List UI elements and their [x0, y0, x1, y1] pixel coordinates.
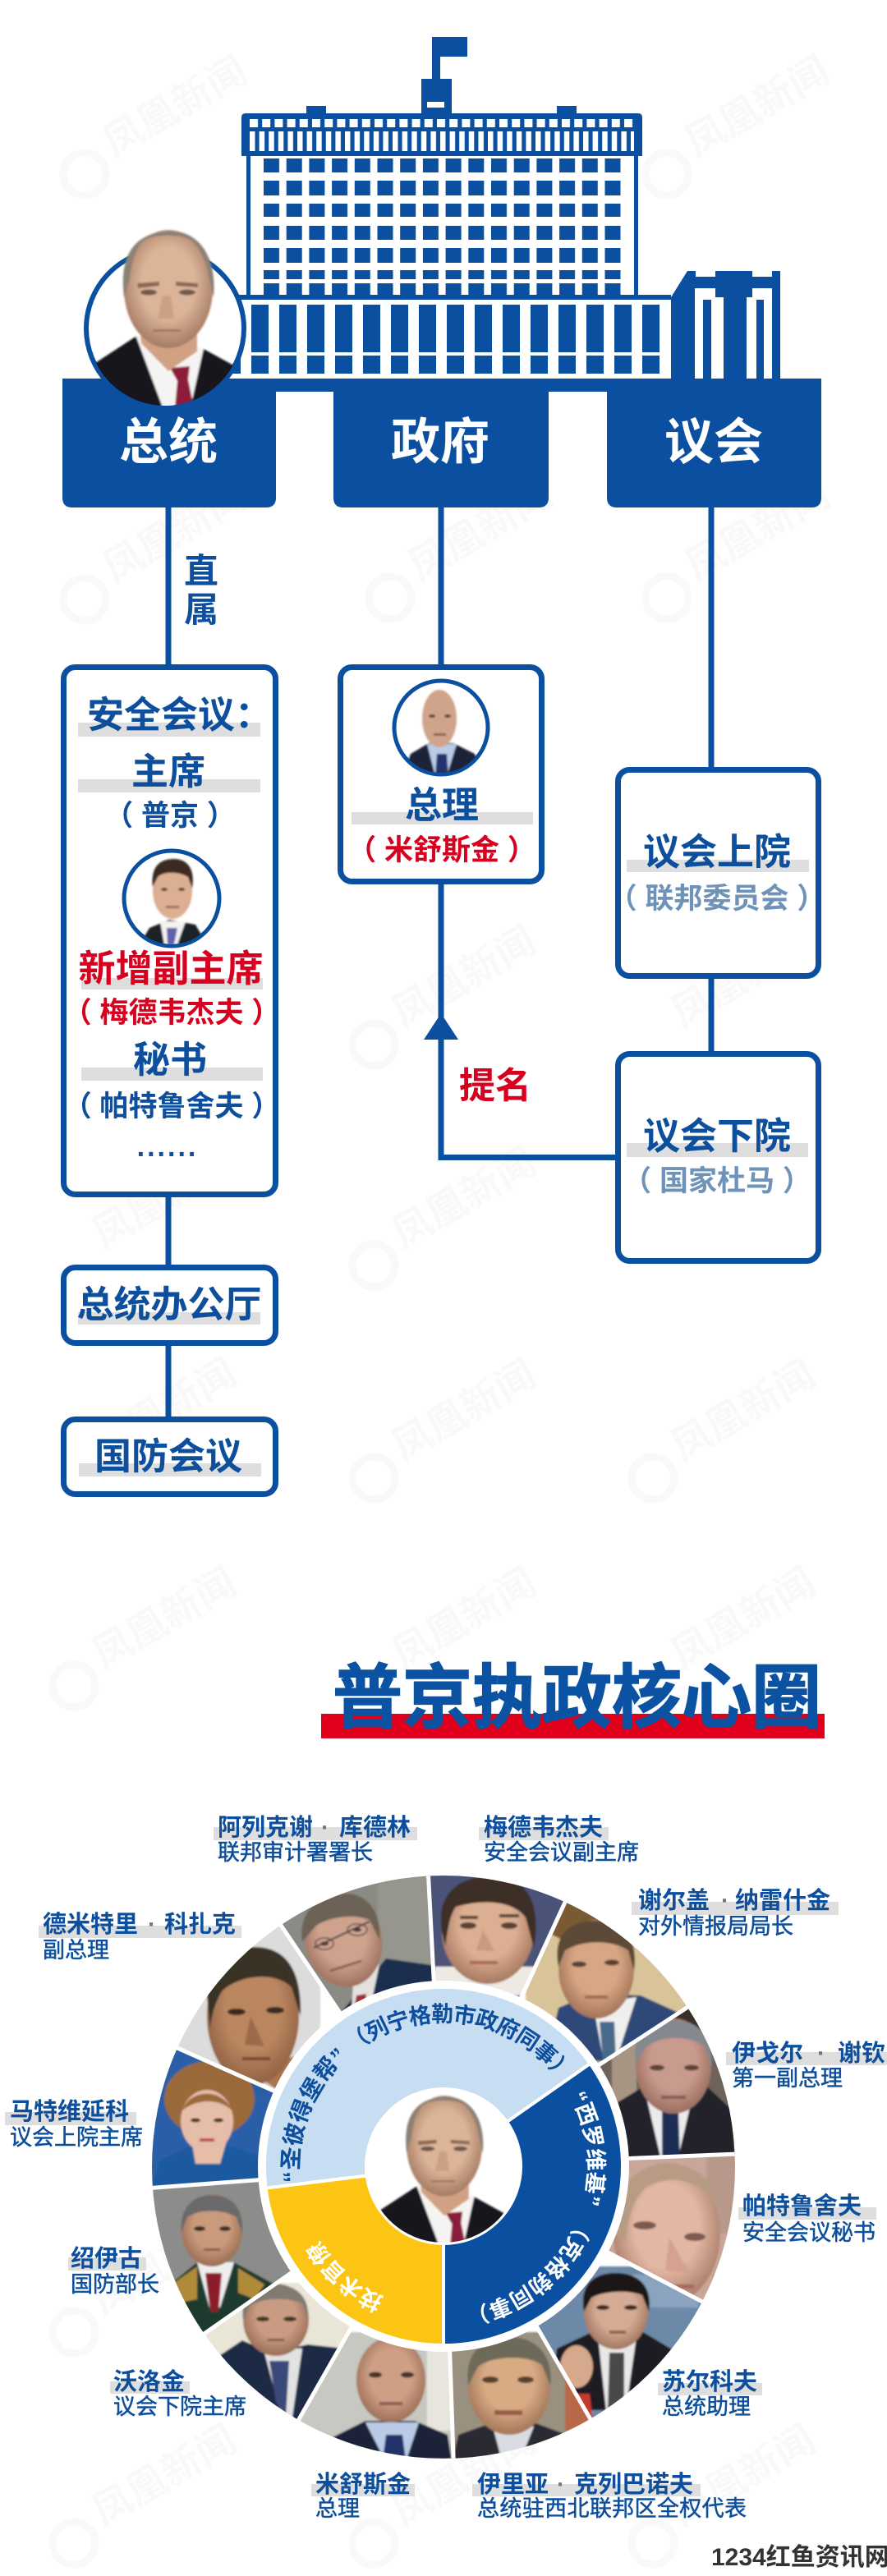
label: Medvedev — [479, 1814, 639, 1865]
label: Sechin: · — [817, 2041, 825, 2067]
label: Kudrin: 联邦审计署署长 — [218, 1840, 373, 1865]
label: direct: 属 — [184, 590, 218, 629]
label: Naryshkin: · — [721, 1888, 729, 1914]
panel: security council: 安全会议： — [87, 694, 272, 736]
site watermark: 1234红鱼资讯网 — [711, 2544, 887, 2571]
panel: prime minister — [340, 667, 542, 882]
watermarks: 凤凰新闻 — [85, 1561, 244, 1678]
panel: security council — [63, 667, 280, 1194]
watermarks: 凤凰新闻 — [385, 1353, 544, 1470]
label: Shoigu: 国防部长 — [71, 2272, 159, 2297]
watermarks: 凤凰新闻 — [402, 473, 560, 590]
portrait: Kozak — [177, 1926, 321, 2089]
label: nominate: 提名 — [459, 1066, 531, 1106]
watermarks: 凤凰新闻 — [664, 2418, 823, 2535]
label: Klebanov: 伊里亚 — [477, 2472, 549, 2498]
portrait wedges — [152, 1876, 735, 2459]
header tabs — [62, 379, 821, 507]
watermarks: 凤凰新闻 — [85, 1141, 244, 1257]
ring: Siloviki group — [445, 2063, 621, 2344]
watermarks: 凤凰新闻 — [96, 49, 255, 166]
label: Klebanov: 总统驻西北联邦区全权代表 — [477, 2496, 747, 2521]
header tabs: 议会 — [664, 415, 763, 470]
watermarks: 凤凰新闻 — [664, 1353, 823, 1470]
panel: security council: 新增副主席 — [78, 948, 264, 990]
header tabs: 政府 — [391, 415, 489, 470]
label: direct: 直 — [184, 552, 218, 590]
panel: security council: （ 普京 ） — [104, 800, 236, 832]
label: Sechin: 伊戈尔 — [732, 2041, 803, 2067]
panel: security council: 主席 — [131, 751, 205, 792]
label: Sechin — [726, 2040, 887, 2091]
portrait: Kudrin — [281, 1876, 432, 2012]
ring: Siloviki group: “西罗维基” — [574, 2092, 607, 2206]
label: Surkov: 总统助理 — [662, 2395, 751, 2419]
header tabs: 总统 — [119, 415, 218, 470]
label: Kozak: 副总理 — [43, 1938, 109, 1963]
watermarks: 凤凰新闻 — [85, 1352, 244, 1468]
ring: Siloviki group: （克格勃同事） — [481, 2230, 590, 2324]
watermarks: 凤凰新闻 — [664, 920, 823, 1036]
portrait: Klebanov — [448, 2332, 590, 2464]
title: 普京执政核心圈 — [333, 1660, 821, 1738]
label: Kozak: · — [148, 1912, 156, 1938]
watermarks: 凤凰新闻 — [385, 1561, 544, 1678]
ring: St Petersburg group — [266, 1989, 588, 2186]
label: Naryshkin: 谢尔盖 — [638, 1888, 710, 1914]
label: Surkov — [658, 2368, 762, 2419]
label: Medvedev: 安全会议副主席 — [484, 1840, 639, 1865]
panel: lower house: 议会下院 — [643, 1115, 791, 1157]
watermarks: 凤凰新闻 — [85, 2207, 244, 2324]
label: Shoigu — [68, 2245, 159, 2297]
portrait: Medvedev — [428, 1876, 565, 1997]
label: Patrushev: 帕特鲁舍夫 — [742, 2192, 862, 2220]
panel: prime minister: 总理 — [405, 784, 479, 826]
portrait: Mishustin — [300, 2332, 456, 2464]
watermarks: 凤凰新闻 — [96, 475, 255, 591]
panel: security council: 秘书 — [133, 1039, 207, 1081]
label: Matviyenko: 马特维延科 — [10, 2098, 129, 2125]
watermarks: 凤凰新闻 — [664, 1561, 823, 1678]
label: Naryshkin: 对外情报局局长 — [638, 1914, 793, 1939]
label: Matviyenko: 议会上院主席 — [10, 2125, 143, 2150]
label: Kudrin: 库德林 — [339, 1814, 411, 1841]
label: Mishustin: 总理 — [315, 2496, 360, 2521]
panel: lower house: （ 国家杜马 ） — [623, 1165, 811, 1197]
portrait: Shoigu — [153, 2182, 291, 2334]
portrait: Medvedev — [124, 851, 219, 946]
portrait: Putin president — [86, 230, 244, 411]
label: Kozak: 德米特里 — [43, 1912, 138, 1938]
label: Mishustin: 米舒斯金 — [315, 2471, 411, 2498]
label: Patrushev: 安全会议秘书 — [742, 2220, 876, 2245]
label: Klebanov — [472, 2471, 747, 2521]
panel: prime minister: （ 米舒斯金 ） — [347, 834, 536, 866]
label: Volodin: 沃洛金 — [113, 2368, 185, 2395]
watermarks: 凤凰新闻 — [664, 1144, 823, 1260]
label: Naryshkin — [632, 1887, 839, 1939]
label: Volodin — [110, 2368, 246, 2419]
portrait: Surkov — [539, 2265, 702, 2419]
panel: lower house — [618, 1054, 818, 1261]
panel: security council: （ 梅德韦杰夫 ） — [63, 997, 280, 1029]
icon: government building — [232, 37, 780, 379]
label: Kozak — [39, 1911, 241, 1963]
portrait: Sechin — [600, 2007, 735, 2156]
ring: St Petersburg group: （列宁格勒市政府同事） — [357, 2003, 565, 2069]
portrait: Naryshkin — [524, 1902, 687, 2063]
portrait: Matviyenko — [152, 2048, 273, 2188]
label: Naryshkin: 纳雷什金 — [735, 1887, 830, 1914]
label: Kudrin: · — [321, 1815, 329, 1841]
label: Sechin: 第一副总理 — [732, 2066, 843, 2091]
label: Surkov: 苏尔科夫 — [662, 2368, 757, 2395]
label: Matviyenko — [5, 2098, 143, 2150]
portrait: Volodin — [205, 2282, 350, 2421]
label: Klebanov: 克列巴诺夫 — [574, 2471, 693, 2498]
watermarks: 凤凰新闻 — [678, 49, 837, 166]
portrait: Putin center — [365, 2087, 522, 2249]
connector lines — [166, 501, 715, 1418]
watermarks: 凤凰新闻 — [385, 1141, 544, 1257]
ring: St Petersburg group: “圣彼得堡帮” — [280, 2048, 340, 2181]
watermarks: 凤凰新闻 — [385, 920, 544, 1036]
panel: upper house: （ 联邦委员会 ） — [609, 883, 825, 915]
label: Medvedev: 梅德韦杰夫 — [484, 1814, 603, 1841]
panel: upper house: 议会上院 — [643, 831, 791, 873]
watermarks: 凤凰新闻 — [385, 2418, 544, 2535]
ring: technocrats: 技术官僚 — [306, 2240, 384, 2314]
ring: technocrats — [267, 2174, 442, 2344]
wheel of inner circle — [152, 1876, 735, 2459]
label: Shoigu: 绍伊古 — [71, 2245, 142, 2272]
panel: presidential office: 总统办公厅 — [76, 1283, 262, 1325]
label: Volodin: 议会下院主席 — [113, 2395, 246, 2419]
watermarks: 凤凰新闻 — [85, 2418, 244, 2535]
watermarks: 凤凰新闻 — [678, 473, 837, 590]
label: Mishustin — [311, 2471, 415, 2521]
panel: presidential office — [64, 1268, 276, 1343]
portrait: Mishustin — [394, 681, 488, 776]
label: Kozak: 科扎克 — [164, 1911, 236, 1938]
label: Klebanov: · — [557, 2472, 565, 2498]
label: direct — [184, 552, 218, 629]
panel: security council: （ 帕特鲁舍夫 ） — [63, 1091, 280, 1123]
portrait: Patrushev — [609, 2154, 735, 2301]
label: Kudrin — [214, 1814, 417, 1865]
arrow: nomination — [424, 1013, 458, 1040]
panel: defense council — [64, 1419, 276, 1495]
panel: security council: ...... — [137, 1132, 198, 1163]
panel: defense council: 国防会议 — [94, 1435, 242, 1477]
panel: upper house — [609, 770, 825, 976]
label: Patrushev — [738, 2192, 876, 2245]
label: Kudrin: 阿列克谢 — [218, 1815, 313, 1841]
label: Sechin: 谢钦 — [838, 2040, 885, 2067]
